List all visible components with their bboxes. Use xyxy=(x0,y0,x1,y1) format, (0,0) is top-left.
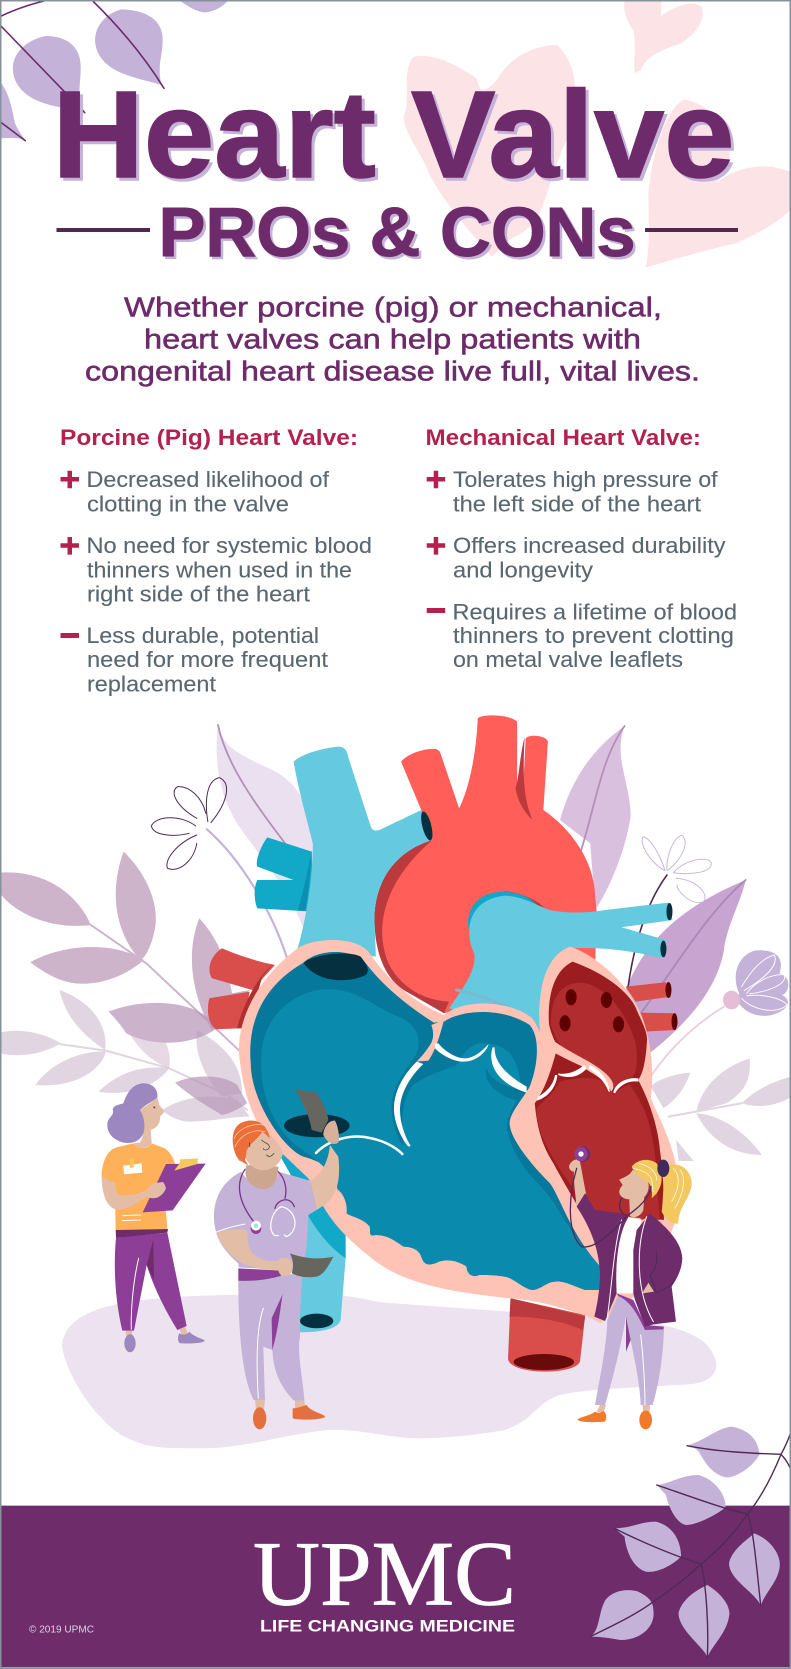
bullet: pro 2: right side of the heart xyxy=(87,582,310,607)
inferior vena cava xyxy=(277,1150,346,1332)
bullet: pro 2: Offers increased durability xyxy=(453,533,726,558)
person: doctor with stethoscope xyxy=(569,1146,692,1429)
bullet: con: thinners to prevent clotting xyxy=(453,623,734,648)
illustration: heart and foliage xyxy=(0,715,791,1448)
intro text: heart valves can help patients with xyxy=(144,324,641,354)
decorative pink hearts behind title xyxy=(404,0,791,268)
intro text xyxy=(85,292,700,386)
logo: UPMC: UPMC xyxy=(253,1522,516,1624)
heading: porcine: Porcine (Pig) Heart Valve: xyxy=(60,425,358,450)
pulmonary veins xyxy=(208,948,678,1032)
descending aorta xyxy=(508,1298,585,1372)
decorative leaf branch top left xyxy=(0,0,227,141)
bullet: pro 1: the left side of the heart xyxy=(453,492,701,516)
left chambers: red xyxy=(535,962,664,1220)
bullet: pro 1: Decreased likelihood of xyxy=(86,467,330,492)
right chambers: teal xyxy=(250,952,603,1290)
foliage: background leaves xyxy=(0,725,791,1161)
intro text: Whether porcine (pig) or mechanical, xyxy=(124,292,662,322)
bullet: pro 1: Tolerates high pressure of xyxy=(453,467,718,492)
decorative leaf branch bottom right xyxy=(590,1427,791,1657)
bullet: con xyxy=(60,623,328,696)
icon: lavender flower right xyxy=(723,950,788,1016)
bullet: pro 2: and longevity xyxy=(453,557,593,582)
bullet: pro 1: clotting in the valve xyxy=(87,492,289,516)
bullet: con: on metal valve leaflets xyxy=(453,647,683,672)
title: Heart Valve: Heart Valve xyxy=(52,67,734,204)
panel: mechanical heart valve list xyxy=(426,425,737,672)
bullet: pro 2 xyxy=(427,533,726,582)
subtitle: PROs & CONs: PROs & CONs xyxy=(161,196,638,274)
panel: porcine heart valve list xyxy=(60,425,372,696)
bullet: con xyxy=(427,599,737,672)
copyright: © 2019 UPMC xyxy=(29,1624,94,1636)
bullet: con: Requires a lifetime of blood xyxy=(452,599,737,624)
superior vena cava xyxy=(255,747,435,957)
bullet: con: need for more frequent xyxy=(87,647,328,672)
tagline: LIFE CHANGING MEDICINE xyxy=(260,1618,515,1636)
bullet: con: Less durable, potential xyxy=(86,623,319,648)
person: nurse with clipboard xyxy=(102,1083,206,1352)
footer banner xyxy=(0,1505,791,1667)
bullet: pro 2: No need for systemic blood xyxy=(86,533,372,558)
ground blob xyxy=(62,1295,716,1448)
intro text: congenital heart disease live full, vital lives. xyxy=(85,356,700,386)
person: doctor holding x-ray xyxy=(214,1089,339,1429)
aorta xyxy=(374,715,597,1013)
subtitle: PROs & CONs xyxy=(56,193,738,274)
bullet: pro 2: thinners when used in the xyxy=(87,557,352,582)
bullet: con: replacement xyxy=(87,672,216,696)
bullet: pro 1 xyxy=(60,467,330,516)
subtitle: PROs & CONs: PROs & CONs xyxy=(158,193,636,271)
bullet: pro 1 xyxy=(427,467,718,516)
heading: mechanical: Mechanical Heart Valve: xyxy=(426,425,701,450)
bullet: pro 2 xyxy=(60,533,372,607)
title: Heart Valve: Heart Valve xyxy=(56,70,737,207)
heart wall xyxy=(239,940,680,1323)
heart valves: white leaflets xyxy=(316,1043,638,1154)
pulmonary artery xyxy=(449,892,672,1033)
